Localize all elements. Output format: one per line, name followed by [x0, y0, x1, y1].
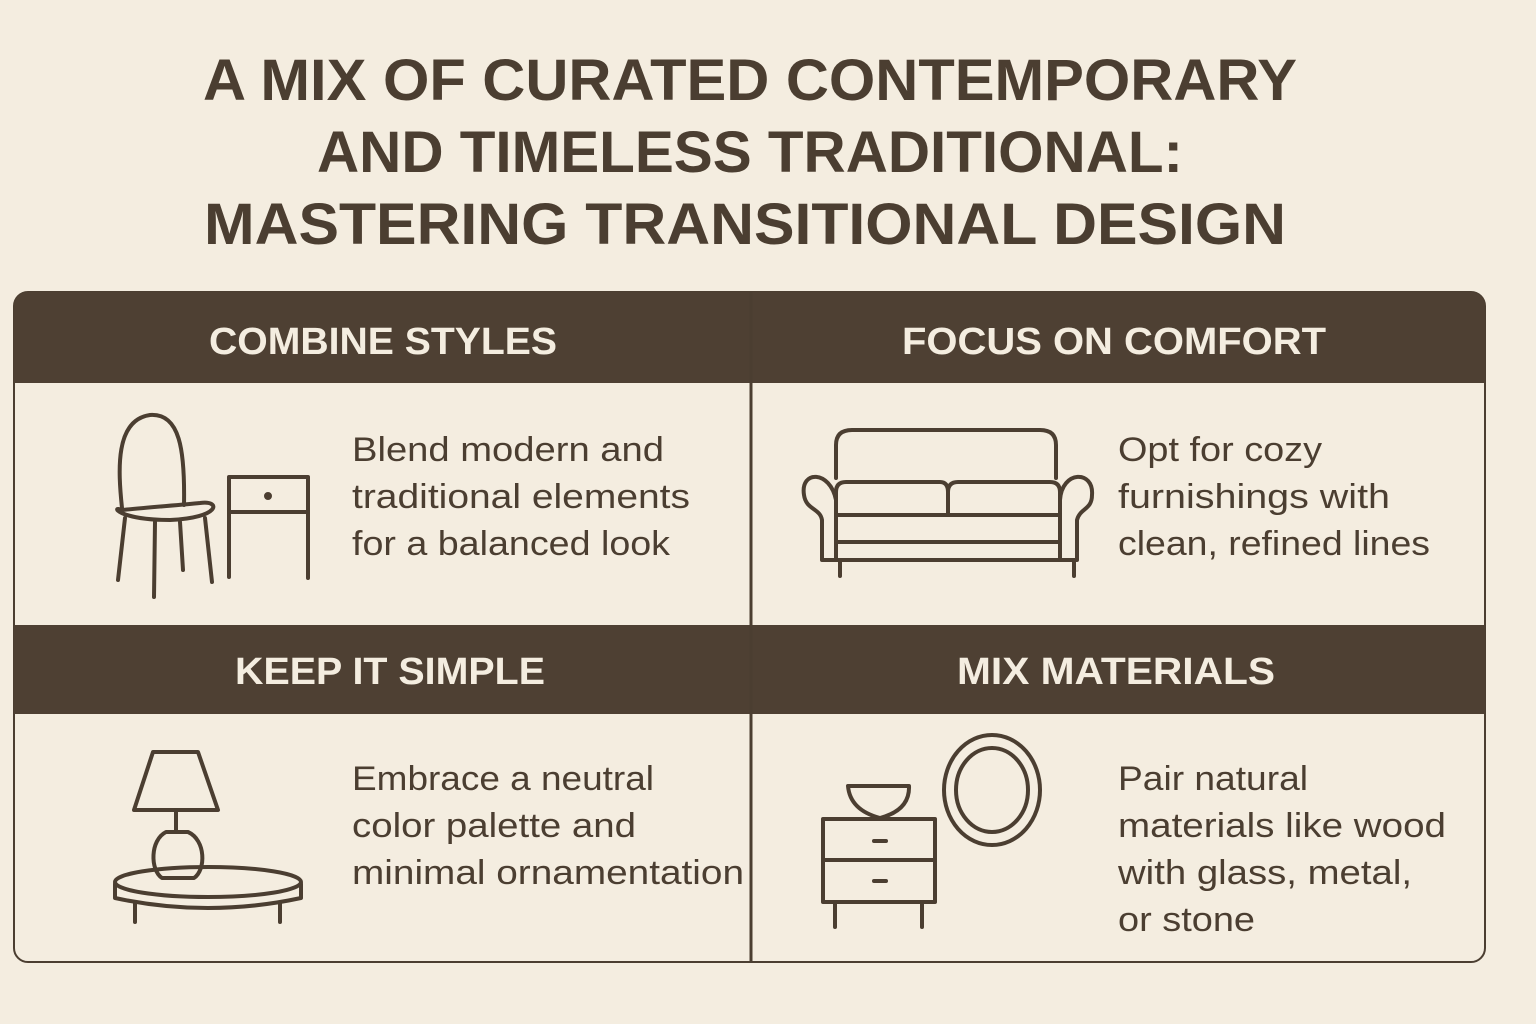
panel grid — [14, 292, 1485, 962]
heading: focus on comfort: FOCUS ON COMFORT — [902, 321, 1326, 363]
heading: keep it simple: KEEP IT SIMPLE — [235, 651, 545, 693]
text: focus on comfort: clean, refined lines — [1118, 525, 1430, 563]
heading: mix materials: MIX MATERIALS — [957, 651, 1275, 693]
title: A MIX OF CURATED CONTEMPORARY — [203, 48, 1297, 113]
text: combine styles: Blend modern and — [352, 431, 664, 469]
title: AND TIMELESS TRADITIONAL: — [317, 120, 1183, 185]
text: mix materials — [1117, 760, 1446, 939]
panel: mix materials — [823, 651, 1446, 939]
panel: keep it simple — [115, 651, 744, 922]
text: focus on comfort: furnishings with — [1118, 478, 1390, 516]
text: mix materials: or stone — [1118, 901, 1255, 939]
text: keep it simple: minimal ornamentation — [352, 854, 744, 892]
text: combine styles: traditional elements — [352, 478, 690, 516]
text: combine styles — [352, 431, 690, 563]
icon: dresser, bowl and mirror — [823, 735, 1040, 927]
text: keep it simple: color palette and — [352, 807, 636, 845]
heading: combine styles: COMBINE STYLES — [209, 321, 557, 363]
title — [203, 48, 1297, 257]
panel: focus on comfort — [804, 321, 1430, 576]
text: keep it simple: Embrace a neutral — [352, 760, 654, 798]
panel: combine styles — [117, 321, 690, 597]
text: mix materials: Pair natural — [1118, 760, 1308, 798]
text: mix materials: with glass, metal, — [1117, 854, 1412, 892]
icon: chair and side table — [117, 415, 308, 597]
text: focus on comfort — [1118, 431, 1430, 563]
text: keep it simple — [352, 760, 744, 892]
text: mix materials: materials like wood — [1118, 807, 1446, 845]
text: combine styles: for a balanced look — [352, 525, 671, 563]
title: MASTERING TRANSITIONAL DESIGN — [204, 192, 1286, 257]
icon: lamp on table — [115, 752, 301, 922]
text: focus on comfort: Opt for cozy — [1118, 431, 1322, 469]
icon: sofa — [804, 430, 1092, 576]
